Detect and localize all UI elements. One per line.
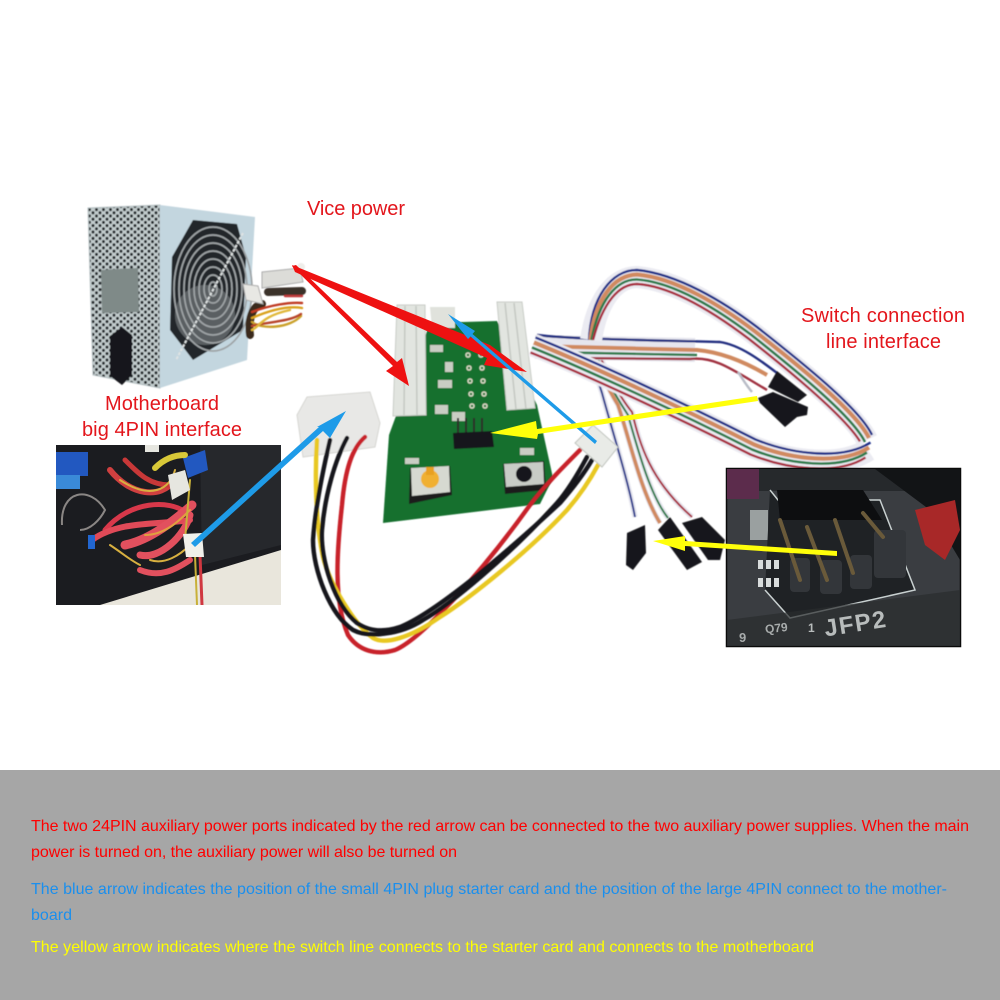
left 24-pin socket: [393, 305, 426, 416]
black dupont connectors lower: [626, 517, 725, 570]
small chips: [758, 560, 779, 587]
silkscreen: JFP2: JFP2: [822, 606, 889, 642]
pin holes: [466, 353, 487, 408]
small white 4-pin plug: [575, 425, 618, 467]
silkscreen: 1: 1: [808, 621, 815, 635]
icon: power supply unit: [88, 205, 305, 388]
label: Motherboard big 4PIN interface: big 4PIN interface: [82, 419, 242, 441]
arrow: yellow from motherboard: [653, 536, 837, 556]
photo: tangled PC case wiring: [56, 445, 281, 605]
magenta part: [727, 469, 759, 499]
silkscreen: Q79: Q79: [764, 620, 789, 636]
top dark area: [759, 470, 904, 491]
white 4-pin connector: [183, 533, 204, 557]
PSU front face: [160, 205, 255, 388]
PSU fan blades: [175, 285, 235, 345]
lower band of ribbon: [530, 338, 870, 469]
PSU wires: [250, 291, 302, 335]
arrow: blue thin small 4-pin: [448, 314, 597, 444]
red component: [915, 500, 960, 560]
case side panel: [200, 445, 281, 565]
PSU power socket: [110, 327, 132, 385]
label: Motherboard big 4PIN interface: Motherboard: [105, 393, 219, 415]
note: red arrow: [31, 818, 969, 861]
header silkscreen outline: [765, 490, 915, 618]
lower dark edge: [727, 590, 960, 646]
floor: [100, 550, 281, 605]
label: Motherboard big 4PIN interface: [82, 393, 242, 441]
jumper caps: [790, 530, 906, 594]
PSU plug tab: [297, 263, 305, 271]
label: Switch connection line interface: line interface: [826, 331, 941, 353]
white connectors: [145, 445, 190, 500]
reset button: [503, 461, 546, 494]
label: Vice power: Vice power: [307, 198, 405, 220]
upper loop of ribbon: [589, 270, 872, 445]
starter card PCB: [383, 302, 553, 523]
PSU fan housing: [170, 220, 246, 360]
grey cables left: [62, 494, 105, 530]
panel background: [0, 770, 1000, 1000]
PSU connectors: [262, 268, 303, 288]
ribbon cable: switch connection line: [530, 270, 872, 570]
black wire two: [322, 438, 592, 630]
note: blue arrow: board: [31, 907, 72, 924]
arrow: red thick to right 24-pin: [292, 265, 527, 372]
dark header block: [777, 490, 882, 520]
panel: explanatory notes: [0, 770, 1000, 1000]
large white molex plug: [297, 392, 380, 457]
note: red arrow: The two 24PIN auxiliary power ports indicated by the red arrow can be connected to the two auxiliary power supplies. When the main: [31, 818, 969, 835]
4-pin power cable: [297, 392, 618, 652]
photo frame: [726, 468, 960, 646]
10-pin header: [453, 418, 494, 449]
case interior: [56, 445, 281, 605]
right dark corner: [875, 469, 960, 560]
small 4-pin socket: [430, 307, 455, 328]
power button: [409, 466, 452, 504]
header pins: [780, 513, 883, 580]
right 24-pin socket: [497, 302, 535, 410]
PSU label plate: [101, 268, 139, 313]
green board: [383, 321, 553, 523]
tangle of red and yellow cables: [92, 455, 202, 605]
arrow: yellow to header: [490, 396, 758, 439]
black wire one: [313, 440, 587, 634]
photo: motherboard JFP2 header: [726, 468, 960, 646]
note: blue arrow: The blue arrow indicates the position of the small 4PIN plug starter card and the position of the large 4PIN connect to the mother-: [31, 881, 947, 898]
upper ribbon and fan-out: [533, 335, 777, 392]
label: Switch connection line interface: Switch connection: [801, 305, 965, 327]
blue tie: [88, 535, 95, 549]
arrow: blue large 4-pin: [191, 411, 346, 547]
surface parts: [405, 345, 534, 464]
note: yellow arrow: The yellow arrow indicates where the switch line connects to the starter card and connects to the motherboard: [31, 939, 814, 956]
blue motherboard parts: [56, 450, 208, 489]
note: red arrow: power is turned on, the auxiliary power will also be turned on: [31, 844, 457, 861]
label: Switch connection line interface: [801, 305, 965, 353]
PSU fan guard: [174, 227, 252, 360]
PSU perforated side: [88, 205, 160, 388]
yellow wire: [316, 440, 598, 641]
white chip block: [750, 510, 768, 540]
note: blue arrow: [31, 881, 947, 924]
red wire: [337, 437, 580, 652]
dangling wires to single pins: [590, 340, 692, 523]
black dupont connectors upper: [758, 371, 808, 427]
arrow: red thin to left 24-pin: [292, 265, 409, 386]
silkscreen: 9: 9: [739, 630, 746, 645]
